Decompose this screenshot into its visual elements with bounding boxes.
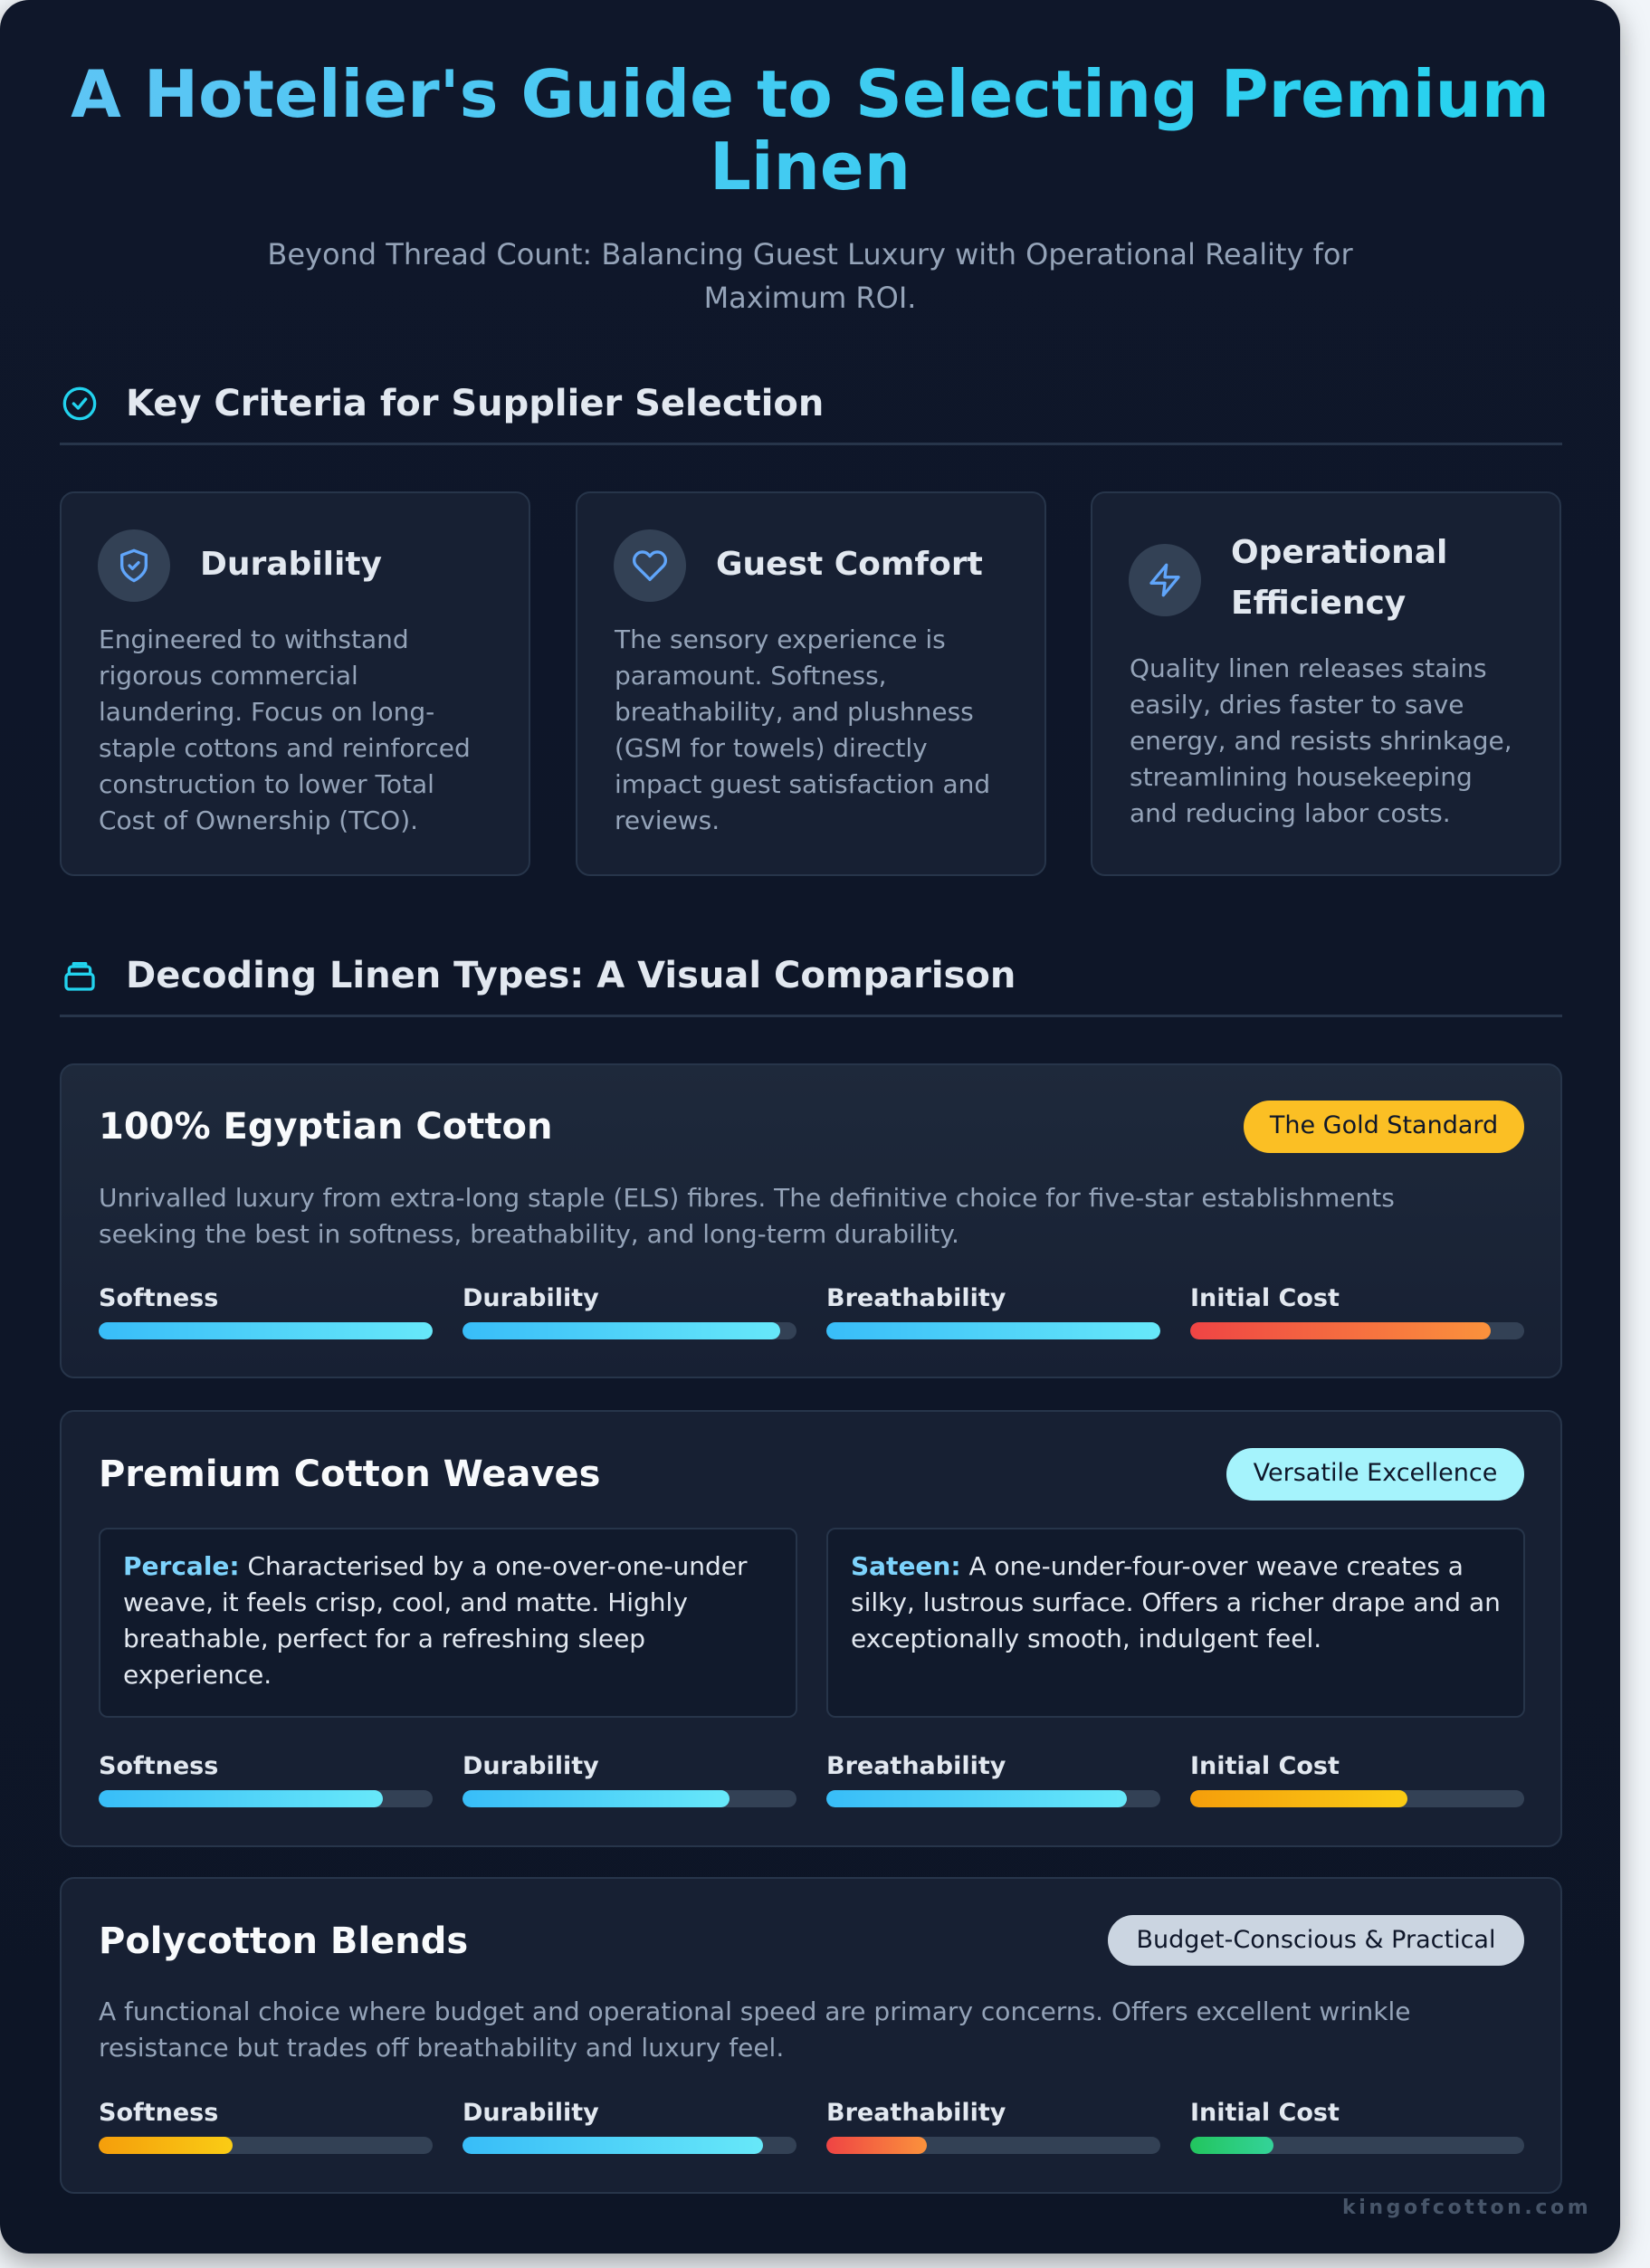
panel: premium cotton weaves <box>60 1410 1562 1847</box>
metrics bars: Durability <box>463 1284 599 1312</box>
panel: polycotton blends <box>60 1877 1562 2194</box>
criterion card: guest comfort: Guest Comfort <box>716 546 983 583</box>
metrics bars: Initial Cost <box>1190 1284 1340 1312</box>
criterion card: operational efficiency: Quality linen releases stains easily, dries faster to save energy, and resists shrinkage, streamlining housekeeping and reducing labor costs. <box>1130 653 1512 828</box>
criterion card: durability <box>60 491 530 876</box>
metrics bars: Softness <box>99 1284 218 1312</box>
panel: egyptian cotton: Unrivalled luxury from extra-long staple (ELS) fibres. The definitive choice for five-star establishments seeking the best in softness, breathability, and long-term durability. <box>99 1183 1395 1249</box>
panel: egyptian cotton: 100% Egyptian Cotton <box>99 1106 552 1148</box>
badge: versatile excellence <box>1226 1448 1524 1501</box>
criterion card: durability: Engineered to withstand rigorous commercial laundering. Focus on long-staple cottons and reinforced construction to lower Total Cost of Ownership (TCO). <box>99 624 471 835</box>
metrics bars: Softness <box>99 1752 218 1780</box>
icon: lightning <box>1129 544 1201 616</box>
sub box: sateen <box>826 1528 1525 1718</box>
section heading: linen types: Decoding Linen Types: A Visual Comparison <box>126 955 1016 996</box>
panel: polycotton blends: Polycotton Blends <box>99 1920 468 1962</box>
metrics bars <box>99 1752 1524 1807</box>
title <box>0 58 1620 203</box>
badge: budget-conscious <box>1108 1915 1524 1966</box>
panel: egyptian cotton <box>60 1063 1562 1378</box>
metrics bars: Breathability <box>826 1284 1006 1312</box>
metrics bars: Softness <box>99 2099 218 2127</box>
criterion card: durability: Durability <box>200 546 382 583</box>
badge: gold standard <box>1244 1101 1524 1153</box>
sub box: percale: Percale: Characterised by a one-over-one-under weave, it feels crisp, cool, and matte. Highly breathable, perfect for a refreshing sleep experience. <box>123 1551 748 1690</box>
icon: check circle <box>63 387 96 420</box>
section heading: linen types <box>60 948 1562 1017</box>
criterion card: guest comfort: The sensory experience is paramount. Softness, breathability, and plushness (GSM for towels) directly impact guest satisfaction and reviews. <box>615 624 990 835</box>
section heading: key criteria: Key Criteria for Supplier Selection <box>126 383 824 424</box>
icon: shield <box>98 529 170 602</box>
metrics bars: Breathability <box>826 1752 1006 1780</box>
criterion card: operational efficiency <box>1091 491 1561 876</box>
criterion card: operational efficiency: Operational <box>1231 534 1447 571</box>
sub box: percale <box>99 1528 797 1718</box>
metrics bars: Initial Cost <box>1190 1752 1340 1780</box>
metrics bars: Durability <box>463 2099 599 2127</box>
title: A Hotelier's Guide to Selecting Premium <box>71 56 1550 132</box>
panel: polycotton blends: A functional choice where budget and operational speed are primary concerns. Offers excellent wrinkle resistance but trades off breathability and luxury feel. <box>99 1996 1411 2063</box>
icon: heart <box>614 529 686 602</box>
icon: stack <box>64 962 95 991</box>
title: Linen <box>710 129 911 205</box>
subtitle: Beyond Thread Count: Balancing Guest Luxury with Operational Reality for Maximum ROI. <box>267 237 1353 315</box>
section heading: key criteria <box>60 376 1562 445</box>
footer brand: kingofcotton.com <box>1342 2197 1591 2219</box>
badge: gold standard: The Gold Standard <box>1270 1111 1498 1139</box>
badge: versatile excellence: Versatile Excellence <box>1254 1459 1497 1487</box>
panel: premium cotton weaves: Premium Cotton Weaves <box>99 1453 600 1495</box>
metrics bars <box>99 1284 1524 1339</box>
metrics bars <box>99 2099 1524 2154</box>
criterion card: operational efficiency: Efficiency <box>1231 585 1406 622</box>
metrics bars: Durability <box>463 1752 599 1780</box>
badge: budget-conscious: Budget-Conscious & Practical <box>1137 1926 1495 1954</box>
sub box: sateen: Sateen: A one-under-four-over weave creates a silky, lustrous surface. Offers a richer drape and an exceptionally smooth, indulgent feel. <box>851 1551 1501 1653</box>
metrics bars: Breathability <box>826 2099 1006 2127</box>
criterion card: guest comfort <box>576 491 1046 876</box>
metrics bars: Initial Cost <box>1190 2099 1340 2127</box>
